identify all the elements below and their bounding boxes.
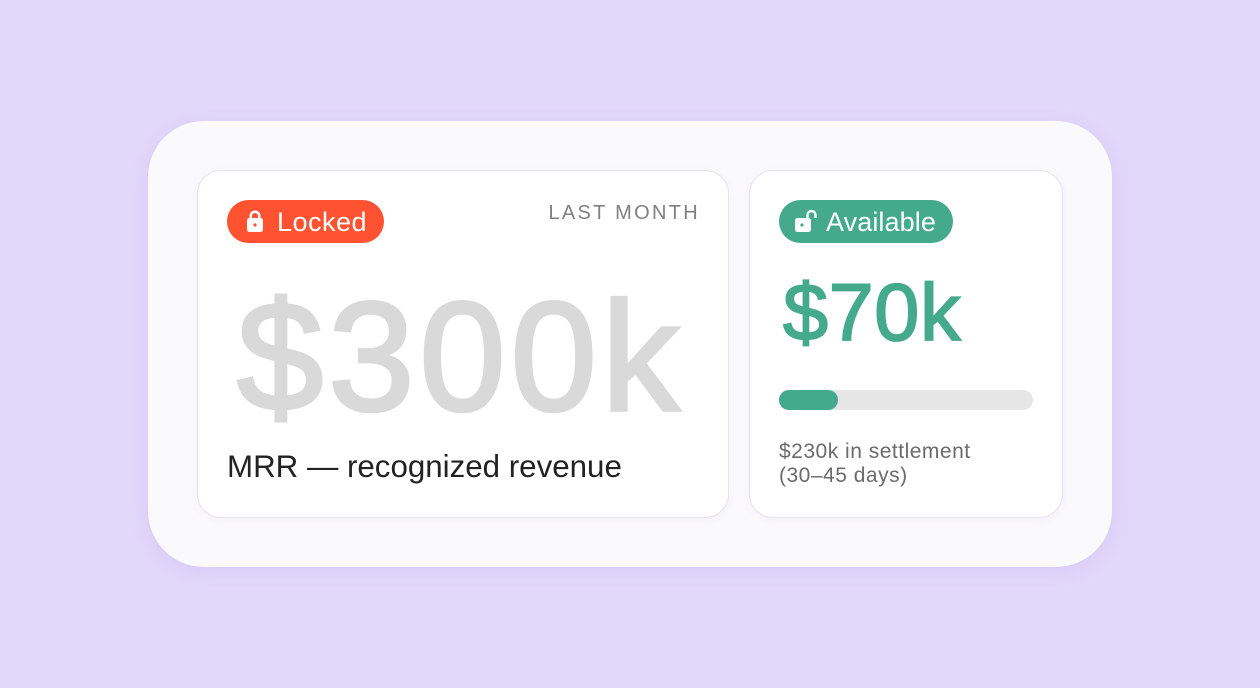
badge label: Locked xyxy=(277,207,367,237)
outer panel xyxy=(148,121,1112,567)
settlement note xyxy=(779,440,971,487)
period label: LAST MONTH xyxy=(548,202,700,224)
settlement note: (30–45 days) xyxy=(779,464,908,487)
panel: available cash card xyxy=(749,170,1063,518)
badge: locked xyxy=(227,200,384,243)
icon: open padlock xyxy=(795,210,817,232)
big value: $300k xyxy=(237,270,684,443)
badge label: Available xyxy=(826,207,936,237)
progress bar xyxy=(779,390,1033,410)
progress fill xyxy=(779,390,838,410)
value: $70k xyxy=(783,268,961,358)
settlement note: $230k in settlement xyxy=(779,440,971,463)
panel: locked MRR card xyxy=(197,170,729,518)
icon: closed padlock xyxy=(247,210,263,232)
caption: MRR — recognized revenue xyxy=(227,449,622,484)
badge: available xyxy=(779,200,953,243)
